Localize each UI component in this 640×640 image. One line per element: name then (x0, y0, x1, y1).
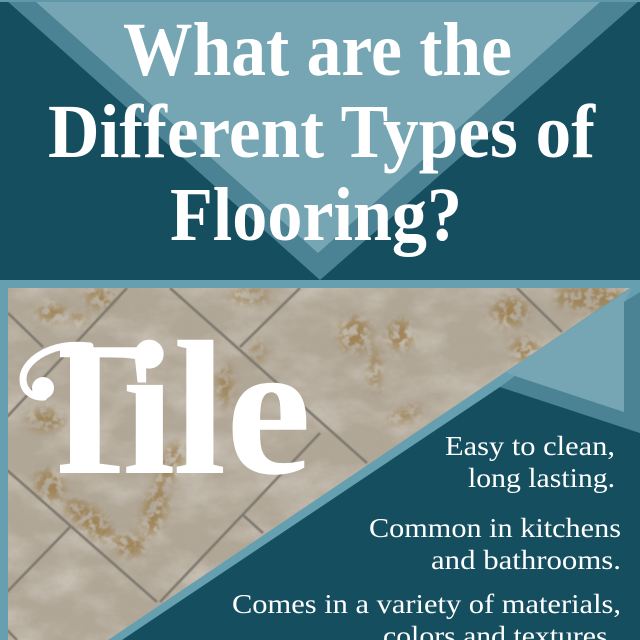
outer triangle (6, 0, 640, 280)
title (48, 8, 597, 257)
point: variety: Comes in a variety of materials, (232, 589, 621, 619)
title: Different Types of (48, 90, 597, 174)
corner triangle mid (500, 292, 640, 433)
point: common rooms (369, 513, 621, 575)
tile photo (7, 286, 640, 640)
title: What are the (123, 8, 512, 92)
tile heading: Tile (21, 302, 311, 515)
inner triangle (36, 2, 600, 253)
point: common rooms: and bathrooms. (431, 545, 621, 575)
heading swash ornament (23, 345, 90, 399)
tile heading (20, 340, 306, 475)
diagonal text panel (122, 387, 640, 640)
corner triangle light (505, 288, 632, 412)
point: easy to clean (445, 431, 615, 493)
title: Flooring? (170, 173, 462, 257)
top edge strip (0, 0, 640, 2)
point: common rooms: Common in kitchens (369, 513, 621, 543)
point: variety (232, 589, 621, 640)
point: easy to clean: Easy to clean, (445, 431, 615, 461)
description text (232, 431, 621, 640)
point: easy to clean: long lasting. (468, 463, 615, 493)
header background (0, 0, 640, 280)
tile section frame (0, 280, 640, 640)
